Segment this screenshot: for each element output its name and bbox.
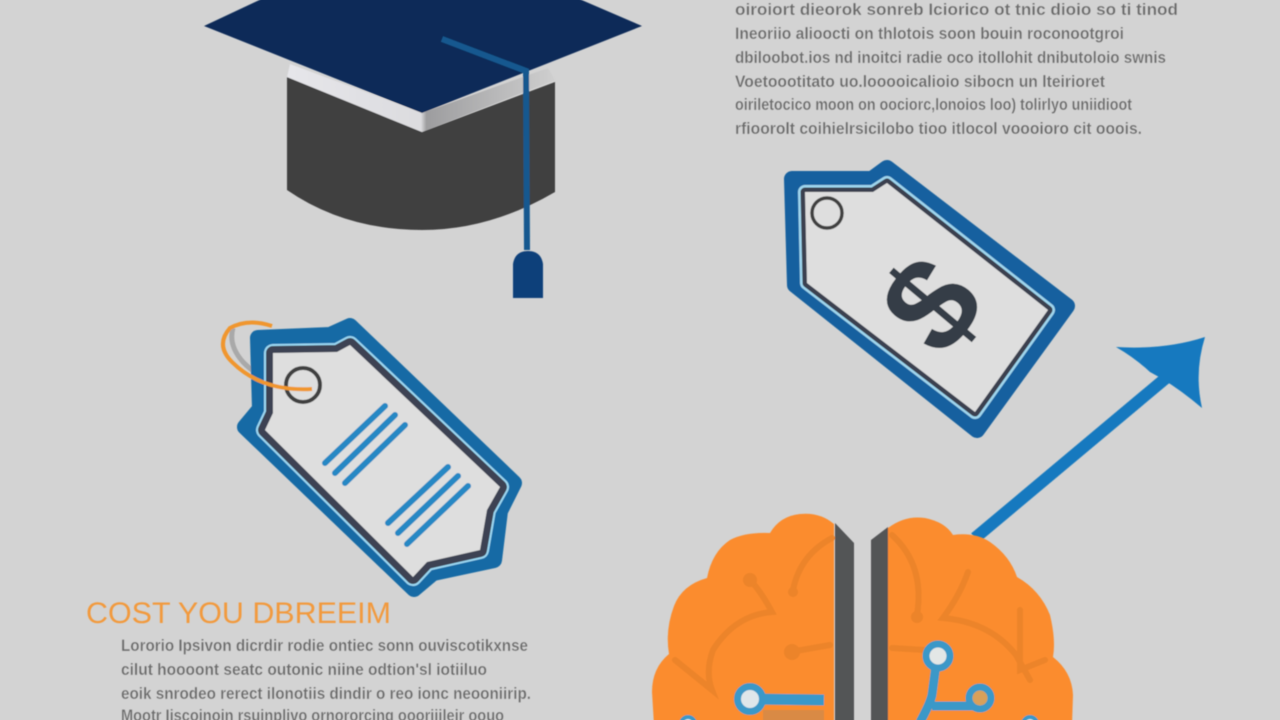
tag ring <box>286 368 320 402</box>
tag inner outline <box>265 345 500 577</box>
brain right lobe <box>888 517 1073 720</box>
tag face <box>805 183 1048 412</box>
right circuit <box>920 644 1037 720</box>
tassel cord <box>442 39 527 250</box>
body text: upper right: rfioorolt coihielrsicilobo tioo itlocol voooioro cit ooois. <box>735 119 1142 138</box>
central divider <box>835 523 888 720</box>
cap board <box>204 0 642 113</box>
body text: lower left: cilut hoooont seatc outonic niine odtion'sl iotiiluo <box>121 660 487 679</box>
left circuit <box>681 686 824 720</box>
body text: upper right: Ineoriio alioocti on thlotois soon bouin roconootgroi <box>735 24 1124 43</box>
body text: upper right: Voetoootitato uo.looooicalioio sibocn un lteirioret <box>735 72 1105 91</box>
dollar sign: $ <box>851 229 1011 380</box>
tag detail lines <box>325 406 468 544</box>
body text: lower left: eoik snrodeo rerect ilonotiis dindir o reo ionc neooniirip. <box>121 684 531 703</box>
icon: left price tag <box>223 322 514 589</box>
icon: dollar price tag <box>792 168 1067 430</box>
cap band <box>287 64 555 132</box>
body text: lower left <box>121 636 531 720</box>
icon: graduation cap <box>204 0 642 298</box>
tag ring <box>812 198 842 228</box>
orange string <box>223 322 312 389</box>
arrow: rising <box>975 337 1205 538</box>
tag outer shape <box>792 168 1067 430</box>
body text: upper right: dbiloobot.ios nd inoitci radie oco itollohit dnibutoloio swnis <box>735 48 1166 67</box>
tag face <box>265 345 500 577</box>
tag string back <box>232 328 296 388</box>
fold nodes <box>743 573 923 660</box>
arrow head <box>1116 337 1205 408</box>
body text: lower left: Lororio Ipsivon dicrdir rodie ontiec sonn ouviscotikxnse <box>121 636 528 655</box>
brain left lobe <box>652 514 834 720</box>
body text: upper right: oiriletocico moon on oociorc,lonoios loo) tolirlyo uniidioot <box>735 95 1132 114</box>
body text: upper right: oiroiort dieorok sonreb Iciorico ot tnic dioio so ti tinod <box>735 0 1178 19</box>
tag inner outline <box>805 183 1048 412</box>
heading: cost you dream: COST YOU DBREEIM <box>86 597 391 630</box>
brain folds <box>675 535 1045 690</box>
arrow shaft <box>975 378 1166 538</box>
tag outer shape <box>245 326 514 589</box>
icon: brain <box>652 514 1073 720</box>
tassel <box>513 251 543 298</box>
cap body <box>287 77 555 230</box>
body text: upper right <box>735 0 1178 138</box>
